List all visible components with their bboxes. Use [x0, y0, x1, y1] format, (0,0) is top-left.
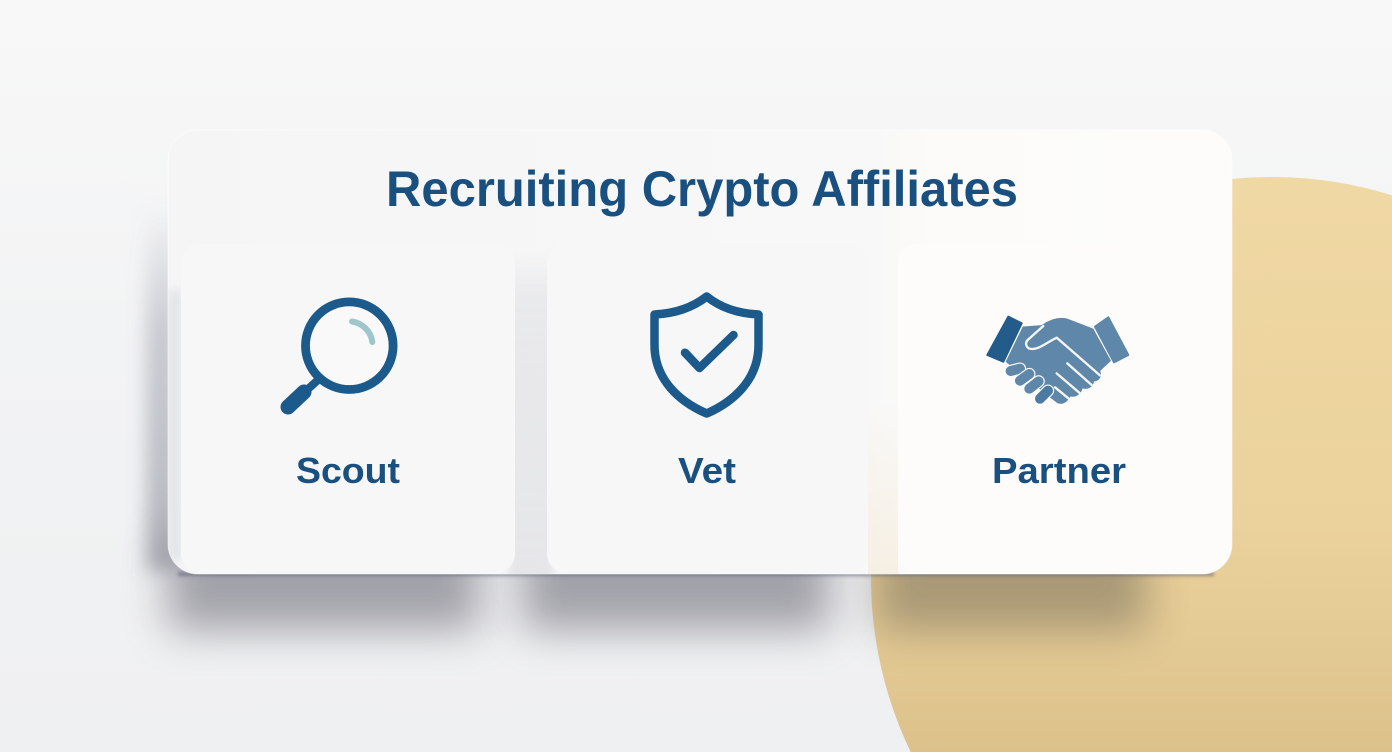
panel: partner card	[898, 244, 1219, 573]
icon: handshake	[987, 317, 1128, 403]
label: scout: Scout	[296, 450, 400, 491]
panel: main card	[168, 130, 1232, 588]
decorative gold circle	[871, 177, 1392, 752]
title: Recruiting Crypto Affiliates	[386, 161, 1018, 217]
icon: shield with check	[654, 296, 758, 414]
label: vet: Vet	[678, 450, 736, 491]
panel drop shadow	[146, 205, 1214, 630]
label: partner: Partner	[992, 450, 1126, 491]
icon: magnifying glass	[288, 302, 393, 407]
panel: vet card	[547, 244, 868, 573]
panel: scout card	[181, 244, 515, 573]
